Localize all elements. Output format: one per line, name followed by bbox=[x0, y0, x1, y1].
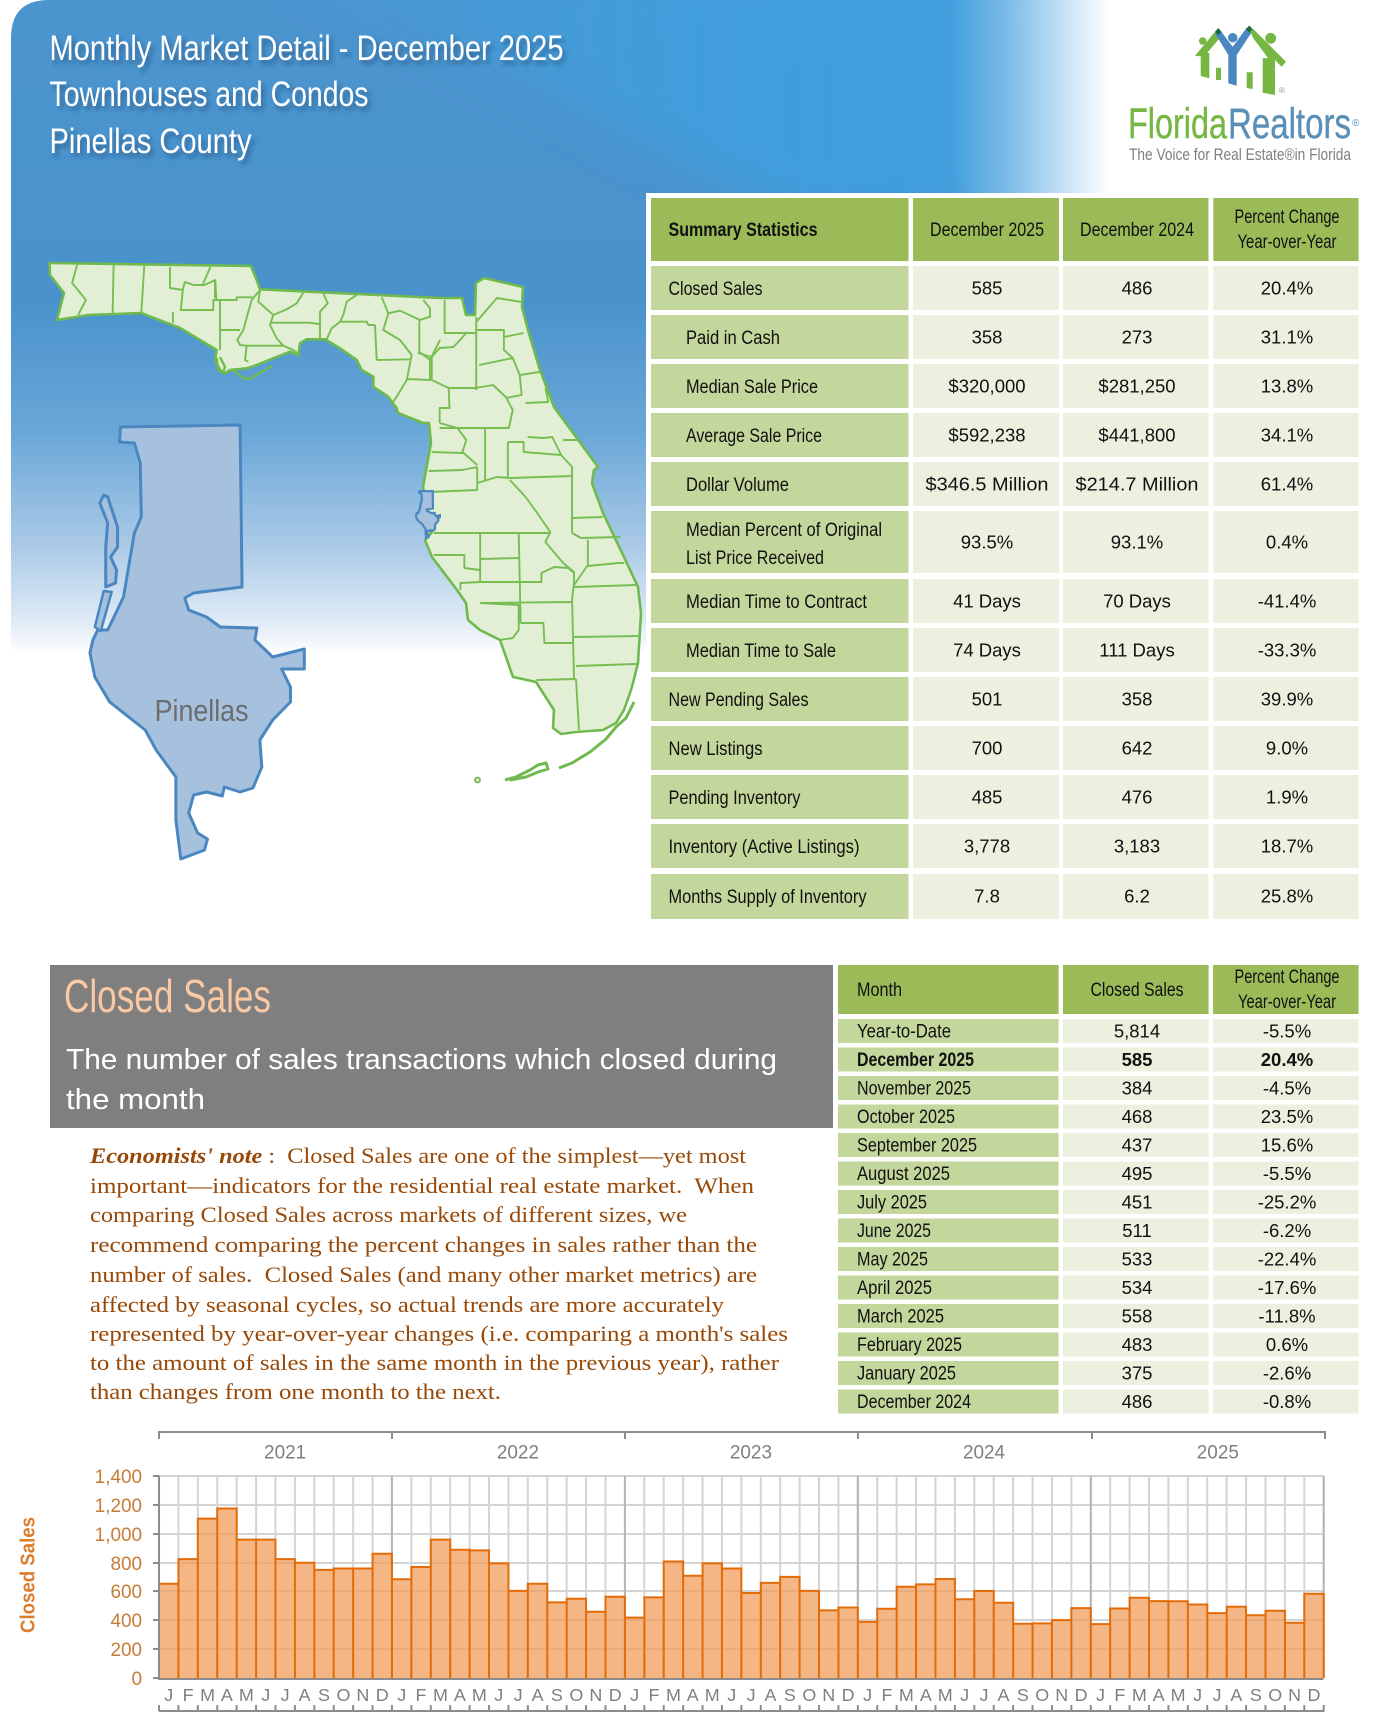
row: April 2025: -17.6% bbox=[1258, 1277, 1316, 1298]
logo: Florida Realtors bbox=[1128, 26, 1360, 164]
row: New Pending Sales bbox=[651, 677, 1359, 721]
description bbox=[66, 1044, 777, 1116]
row: August 2025: 495 bbox=[1122, 1163, 1152, 1184]
row: December 2024: -0.8% bbox=[1263, 1391, 1311, 1412]
row: March 2025 bbox=[838, 1304, 1359, 1328]
row: Median Time to Contract: -41.4% bbox=[1258, 590, 1316, 612]
month labels: JFMAMJJASOND bbox=[1096, 1685, 1321, 1705]
county label: Pinellas bbox=[155, 693, 248, 728]
top axis with years: 2023 bbox=[730, 1442, 772, 1464]
row: Paid in Cash: 358 bbox=[972, 326, 1002, 348]
row: Inventory (Active Listings): 18.7% bbox=[1261, 836, 1313, 856]
row: Pending Inventory: 476 bbox=[1122, 786, 1152, 808]
row: September 2025: 437 bbox=[1122, 1134, 1152, 1156]
row: December 2025: 20.4% bbox=[1261, 1049, 1313, 1070]
row: Pending Inventory bbox=[651, 775, 1359, 819]
row: July 2025: -25.2% bbox=[1258, 1192, 1316, 1212]
table header bbox=[651, 198, 1359, 261]
row: Average Sale Price: $441,800 bbox=[1098, 424, 1176, 446]
row: Year-to-Date: 5,814 bbox=[1114, 1020, 1160, 1042]
row: Closed Sales: Closed Sales bbox=[668, 279, 762, 300]
row: September 2025: September 2025 bbox=[857, 1136, 977, 1156]
row: Median Sale Price: $320,000 bbox=[948, 376, 1026, 396]
row: Pending Inventory: Pending Inventory bbox=[668, 788, 801, 809]
y axis: 1,400 bbox=[95, 1467, 142, 1488]
row: Median Percent of Original List Price Received: 93.5% bbox=[961, 532, 1013, 552]
row: Closed Sales: 20.4% bbox=[1261, 278, 1313, 298]
table header: December 2025 bbox=[930, 220, 1044, 241]
row: Median Sale Price: Median Sale Price bbox=[686, 377, 818, 398]
top axis with years: 2021 bbox=[264, 1442, 306, 1464]
table header: Closed Sales bbox=[1090, 980, 1184, 1001]
row: May 2025 bbox=[838, 1247, 1359, 1271]
month labels bbox=[164, 1685, 1321, 1705]
top axis with years: 2024 bbox=[963, 1442, 1005, 1464]
month labels: JFMAMJJASOND bbox=[630, 1685, 855, 1705]
row: New Pending Sales: 39.9% bbox=[1261, 688, 1313, 710]
logo: Florida Realtors: ® bbox=[1352, 118, 1360, 129]
row: September 2025: 15.6% bbox=[1261, 1134, 1313, 1156]
county lines: panhandle bbox=[180, 280, 440, 402]
top axis with years: 2025 bbox=[1197, 1442, 1239, 1464]
top axis with years: 2022 bbox=[497, 1442, 539, 1464]
row: Median Time to Sale: 74 Days bbox=[953, 640, 1021, 660]
row: Months Supply of Inventory bbox=[651, 874, 1359, 919]
row: Year-to-Date: -5.5% bbox=[1263, 1020, 1311, 1042]
text block: economists' note: represented by year-over-year changes (i.e. comparing a month's sales bbox=[90, 1321, 788, 1346]
text block: economists' note: recommend comparing the percent changes in sales rather than the bbox=[90, 1232, 757, 1257]
row: March 2025: 558 bbox=[1122, 1306, 1152, 1326]
y axis: 200 bbox=[110, 1640, 142, 1661]
row: Closed Sales bbox=[651, 266, 1359, 310]
row: Median Time to Sale: 111 Days bbox=[1099, 640, 1175, 660]
row: Average Sale Price: Average Sale Price bbox=[686, 426, 822, 447]
row: December 2024 bbox=[838, 1390, 1359, 1414]
row: February 2025: 0.6% bbox=[1266, 1334, 1308, 1355]
table header: Year-over-Year bbox=[1238, 992, 1337, 1013]
row: February 2025: February 2025 bbox=[857, 1335, 962, 1356]
icon: houses and people: ® bbox=[1279, 86, 1285, 95]
grid lines bbox=[158, 1476, 1326, 1678]
row: Pending Inventory: 485 bbox=[972, 786, 1002, 808]
row: July 2025: 451 bbox=[1122, 1192, 1152, 1212]
y axis: 800 bbox=[110, 1554, 142, 1575]
table header: Year-over-Year bbox=[1238, 232, 1337, 253]
row: Paid in Cash: Paid in Cash bbox=[686, 328, 780, 349]
row: June 2025 bbox=[838, 1218, 1359, 1242]
row: March 2025: March 2025 bbox=[857, 1306, 944, 1328]
row: Median Time to Sale: -33.3% bbox=[1258, 640, 1316, 660]
row: Dollar Volume: Dollar Volume bbox=[686, 475, 789, 496]
inset map: Pinellas County bbox=[90, 425, 304, 859]
row: Inventory (Active Listings): 3,183 bbox=[1114, 836, 1160, 856]
text block: economists' note: comparing Closed Sales across markets of different sizes, we bbox=[90, 1202, 687, 1227]
title block: Pinellas County bbox=[50, 122, 252, 161]
row: Inventory (Active Listings): Inventory (Active Listings) bbox=[668, 837, 860, 858]
row: January 2025: -2.6% bbox=[1263, 1362, 1311, 1384]
row: New Pending Sales: 501 bbox=[972, 688, 1002, 710]
row: October 2025: October 2025 bbox=[857, 1107, 955, 1128]
row: Median Sale Price: $281,250 bbox=[1098, 376, 1176, 396]
row: August 2025: -5.5% bbox=[1263, 1163, 1311, 1184]
table backing bbox=[646, 193, 1380, 663]
row: Median Percent of Original List Price Received bbox=[651, 511, 1359, 573]
row: July 2025 bbox=[838, 1190, 1359, 1214]
row: Inventory (Active Listings) bbox=[651, 824, 1359, 868]
text block: economists' note: than changes from one month to the next. bbox=[90, 1379, 501, 1404]
y axis bbox=[95, 1467, 1324, 1690]
row: April 2025: April 2025 bbox=[857, 1278, 932, 1299]
row: New Listings: 9.0% bbox=[1266, 738, 1308, 758]
text block: economists' note: to the amount of sales in the same month in the previous year), rather bbox=[90, 1350, 780, 1375]
text block: economists' note bbox=[89, 1143, 788, 1404]
text block: economists' note: affected by seasonal cycles, so actual trends are more accurately bbox=[90, 1292, 724, 1317]
row: New Listings bbox=[651, 726, 1359, 770]
table header: Percent Change bbox=[1234, 207, 1340, 228]
row: May 2025: 533 bbox=[1122, 1248, 1152, 1270]
y axis title: Closed Sales bbox=[17, 1517, 39, 1633]
bottom axis with ticks bbox=[158, 1708, 1326, 1711]
map: Florida counties bbox=[50, 263, 641, 782]
row: November 2025 bbox=[838, 1076, 1359, 1100]
y axis: 1,200 bbox=[95, 1496, 142, 1517]
row: Average Sale Price: $592,238 bbox=[948, 424, 1026, 446]
row: January 2025: 375 bbox=[1122, 1362, 1152, 1384]
y axis: 600 bbox=[110, 1582, 142, 1603]
row: September 2025 bbox=[838, 1133, 1359, 1157]
panel: Closed Sales heading bbox=[50, 965, 833, 1128]
barrier islands: Apalachicola bbox=[217, 357, 272, 379]
row: December 2025 bbox=[838, 1048, 1359, 1072]
row: June 2025: 511 bbox=[1122, 1220, 1152, 1241]
title block: Monthly Market Detail - December 2025 bbox=[50, 29, 564, 68]
description: The number of sales transactions which closed during bbox=[66, 1044, 777, 1076]
row: Year-to-Date bbox=[838, 1019, 1359, 1043]
row: Months Supply of Inventory: 7.8 bbox=[974, 886, 1000, 906]
row: December 2024: December 2024 bbox=[857, 1392, 971, 1413]
row: April 2025: 534 bbox=[1122, 1277, 1152, 1298]
row: Year-to-Date: Year-to-Date bbox=[857, 1022, 951, 1042]
table header: Percent Change bbox=[1234, 967, 1340, 988]
bar chart: closed sales by month bbox=[17, 1432, 1326, 1711]
row: Closed Sales: 486 bbox=[1122, 278, 1152, 298]
row: Paid in Cash: 31.1% bbox=[1261, 326, 1313, 348]
month labels: JFMAMJJASOND bbox=[397, 1685, 622, 1705]
row: December 2025: December 2025 bbox=[857, 1050, 974, 1071]
row: Dollar Volume: $214.7 Million bbox=[1076, 474, 1198, 494]
header background gradient bbox=[11, 0, 1180, 655]
row: May 2025: May 2025 bbox=[857, 1250, 928, 1270]
y axis: 0 bbox=[132, 1669, 142, 1690]
table header: December 2024 bbox=[1080, 220, 1194, 241]
row: Average Sale Price: 34.1% bbox=[1261, 424, 1313, 446]
row: New Listings: New Listings bbox=[668, 739, 762, 760]
row: January 2025 bbox=[838, 1361, 1359, 1385]
table: summary statistics bbox=[646, 193, 1380, 928]
y axis: 400 bbox=[110, 1611, 142, 1632]
row: Paid in Cash: 273 bbox=[1122, 326, 1152, 348]
row: Median Percent of Original List Price Received: Median Percent of Original bbox=[686, 520, 882, 541]
row: April 2025 bbox=[838, 1276, 1359, 1300]
title block: Townhouses and Condos bbox=[50, 75, 368, 114]
row: Median Percent of Original List Price Received: 0.4% bbox=[1266, 532, 1308, 552]
row: November 2025: 384 bbox=[1122, 1078, 1152, 1098]
row: Median Time to Contract: 70 Days bbox=[1103, 590, 1171, 612]
row: November 2025: November 2025 bbox=[857, 1078, 971, 1100]
row: Dollar Volume bbox=[651, 462, 1359, 506]
row: Median Time to Sale bbox=[651, 628, 1359, 672]
heading: Closed Sales bbox=[64, 970, 271, 1022]
text block: economists' note: number of sales. Closed Sales (and many other market metrics) are bbox=[90, 1262, 757, 1287]
row: October 2025 bbox=[838, 1104, 1359, 1128]
row: May 2025: -22.4% bbox=[1258, 1248, 1316, 1270]
row: Inventory (Active Listings): 3,778 bbox=[964, 836, 1010, 856]
table header: Month bbox=[857, 980, 902, 1001]
row: Dollar Volume: $346.5 Million bbox=[926, 474, 1048, 494]
title block bbox=[50, 29, 564, 161]
row: Months Supply of Inventory: 25.8% bbox=[1261, 886, 1313, 906]
row: July 2025: July 2025 bbox=[857, 1192, 927, 1214]
row: Median Percent of Original List Price Received: List Price Received bbox=[686, 548, 824, 569]
wordmark: Florida bbox=[1128, 100, 1227, 148]
row: Median Percent of Original List Price Received: 93.1% bbox=[1111, 532, 1163, 552]
row: Months Supply of Inventory: Months Supply of Inventory bbox=[668, 887, 867, 908]
row: Median Time to Contract bbox=[651, 579, 1359, 623]
row: Median Time to Sale: Median Time to Sale bbox=[686, 641, 836, 662]
description: the month bbox=[66, 1084, 205, 1116]
month labels: JFMAMJJASOND bbox=[164, 1685, 389, 1705]
row: March 2025: -11.8% bbox=[1258, 1306, 1316, 1326]
row: Months Supply of Inventory: 6.2 bbox=[1124, 886, 1150, 906]
county lines: east and peninsula bbox=[72, 265, 638, 730]
row: December 2024: 486 bbox=[1122, 1391, 1152, 1412]
row: November 2025: -4.5% bbox=[1263, 1078, 1311, 1098]
row: June 2025: June 2025 bbox=[857, 1221, 931, 1242]
small Pinellas highlight bbox=[416, 491, 440, 538]
row: December 2025: 585 bbox=[1122, 1049, 1152, 1070]
row: Dollar Volume: 61.4% bbox=[1261, 474, 1313, 494]
row: New Pending Sales: New Pending Sales bbox=[668, 690, 808, 711]
row: October 2025: 23.5% bbox=[1261, 1106, 1313, 1127]
row: February 2025 bbox=[838, 1332, 1359, 1356]
row: Closed Sales: 585 bbox=[972, 278, 1002, 298]
bars bbox=[159, 1508, 1324, 1678]
row: January 2025: January 2025 bbox=[857, 1364, 956, 1384]
row: Median Time to Contract: Median Time to Contract bbox=[686, 592, 868, 613]
row: Paid in Cash bbox=[651, 315, 1359, 359]
table header bbox=[838, 965, 1359, 1014]
text block: economists' note: Economists' note : Closed Sales are one of the simplest—yet most bbox=[89, 1143, 746, 1168]
row: Median Time to Contract: 41 Days bbox=[953, 590, 1021, 612]
row: August 2025: August 2025 bbox=[857, 1164, 950, 1185]
row: October 2025: 468 bbox=[1122, 1106, 1152, 1127]
islands: Florida Keys bbox=[475, 702, 634, 782]
table header: Summary Statistics bbox=[668, 220, 818, 241]
row: Pending Inventory: 1.9% bbox=[1266, 786, 1308, 808]
top axis with years bbox=[159, 1432, 1325, 1464]
y axis: 1,000 bbox=[95, 1525, 142, 1546]
icon: houses and people bbox=[1195, 26, 1286, 95]
row: Average Sale Price bbox=[651, 413, 1359, 457]
row: New Listings: 642 bbox=[1122, 738, 1152, 758]
row: Median Sale Price bbox=[651, 364, 1359, 408]
month labels: JFMAMJJASOND bbox=[863, 1685, 1088, 1705]
row: June 2025: -6.2% bbox=[1263, 1220, 1311, 1241]
text block: economists' note: important—indicators for the residential real estate market. When bbox=[90, 1173, 754, 1198]
row: New Listings: 700 bbox=[972, 738, 1002, 758]
row: Median Sale Price: 13.8% bbox=[1261, 376, 1313, 396]
row: August 2025 bbox=[838, 1162, 1359, 1186]
table: monthly closed sales bbox=[838, 965, 1359, 1414]
row: February 2025: 483 bbox=[1122, 1334, 1152, 1355]
row: New Pending Sales: 358 bbox=[1122, 688, 1152, 710]
